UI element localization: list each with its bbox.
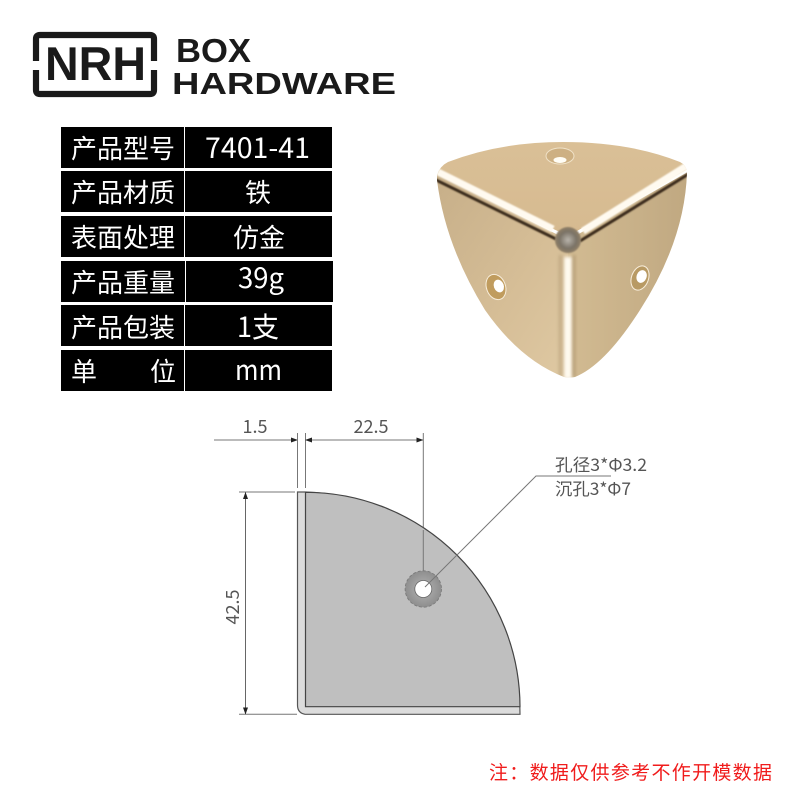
logo: NRH box hardware <box>36 32 396 101</box>
corner ball <box>555 227 581 253</box>
left face <box>437 174 568 378</box>
row: material: 产品材质 <box>71 173 175 210</box>
callout text: 沉孔3*Φ7 <box>555 475 631 500</box>
footnote: 注：数据仅供参考不作开模数据 <box>489 758 772 785</box>
dimension 42.5 <box>219 492 297 714</box>
row: weight <box>61 257 333 302</box>
row: unit <box>61 349 332 391</box>
logo word BOX: BOX <box>176 32 251 69</box>
dimension 1.5 <box>214 413 306 488</box>
row: package: 产品包装 <box>71 308 175 345</box>
row: material: 铁 <box>245 173 271 210</box>
row: finish: 仿金 <box>233 218 285 255</box>
dimension 42.5: 42.5 <box>219 590 245 624</box>
logo letters NRH: NRH <box>45 37 146 90</box>
row: unit: 位 <box>150 352 176 389</box>
row: finish <box>61 216 332 257</box>
callout text: 孔径3*Φ3.2 <box>555 451 647 476</box>
vertical edge highlight <box>564 257 572 379</box>
right face <box>568 172 687 378</box>
specification table <box>61 127 333 391</box>
row: package: 1支 <box>237 306 279 346</box>
row: model: 产品型号 <box>71 129 175 166</box>
product photo: gold corner protector <box>437 142 687 378</box>
row: model <box>61 127 332 168</box>
right countersunk hole <box>628 263 652 293</box>
dimension 22.5: 22.5 <box>354 413 388 439</box>
dimension line over plate <box>422 530 424 589</box>
dark edge shadows <box>434 172 692 241</box>
dimension 1.5: 1.5 <box>243 413 268 439</box>
logo frame <box>36 35 154 94</box>
row: weight: 39g <box>238 257 284 297</box>
row: unit: 单 <box>71 352 97 389</box>
callout text <box>555 451 647 500</box>
dimension 22.5 <box>306 413 423 530</box>
logo word HARDWARE: HARDWARE <box>172 66 396 101</box>
row: material <box>61 171 332 212</box>
left countersunk hole <box>483 272 509 302</box>
vertical edge shading <box>559 255 562 377</box>
row: package <box>61 305 332 346</box>
countersink hole <box>405 571 441 607</box>
leader line <box>425 476 611 587</box>
row: unit: mm <box>235 349 282 389</box>
top face <box>438 142 686 232</box>
plate inner face <box>306 492 520 707</box>
row: finish: 表面处理 <box>71 218 175 255</box>
row: model: 7401-41 <box>205 127 310 167</box>
top countersunk hole <box>546 148 574 164</box>
technical drawing <box>214 413 647 714</box>
edge highlights <box>438 165 688 231</box>
plate outline with flange <box>298 492 520 714</box>
row: weight: 产品重量 <box>71 263 175 300</box>
